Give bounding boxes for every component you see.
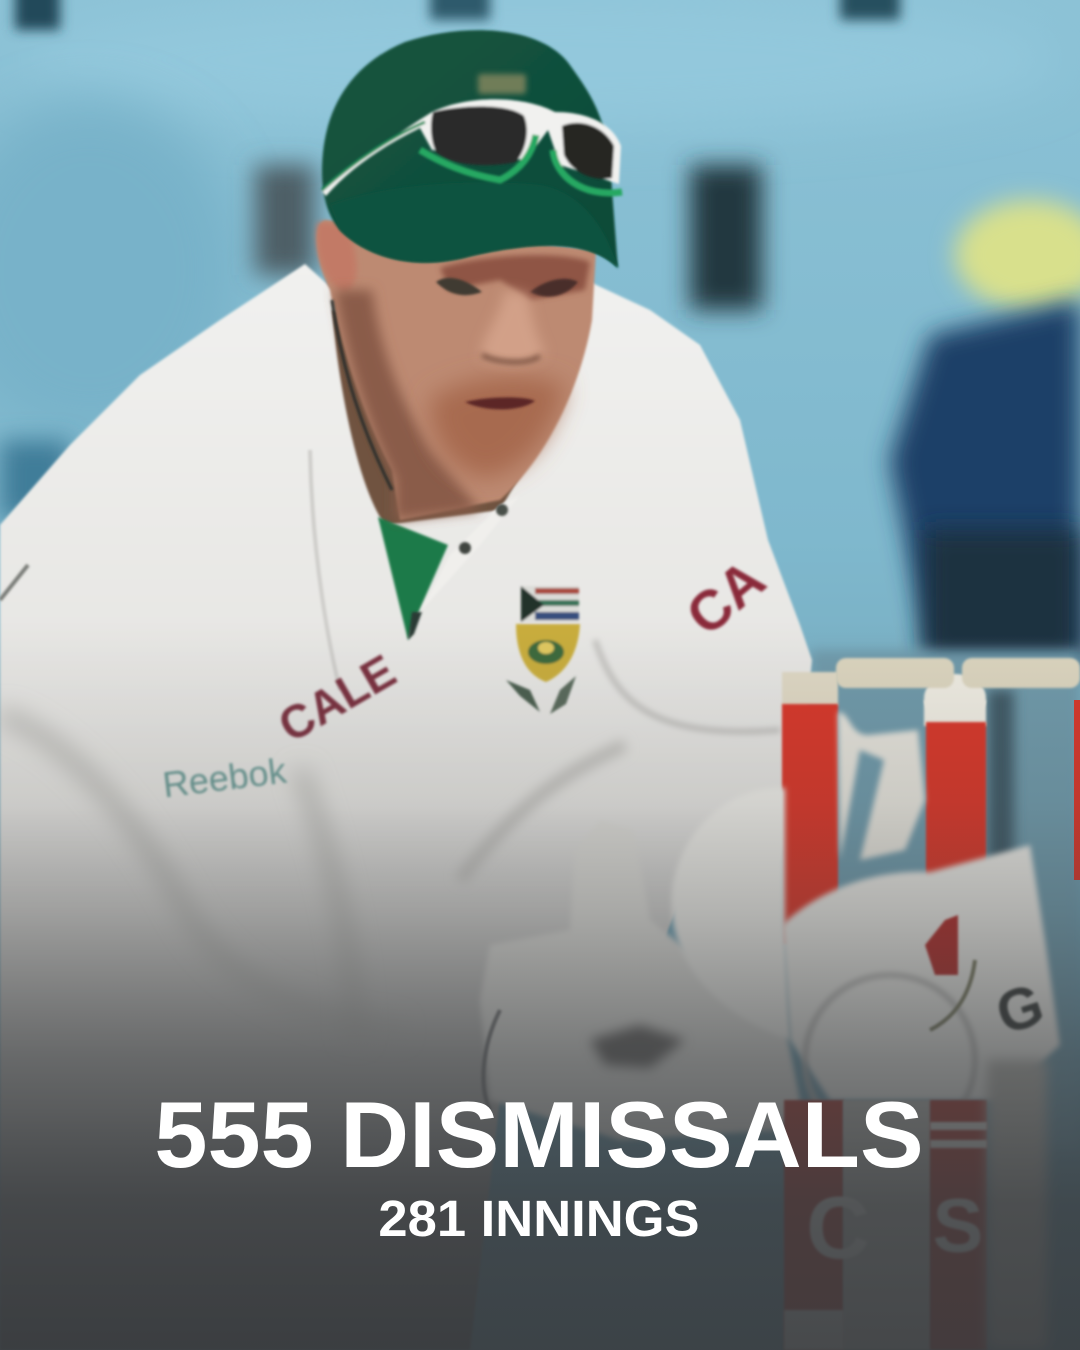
sponsor text on sleeve: Reebok [160,750,290,806]
subtitle: 281 INNINGS [378,1190,700,1247]
shirt collar and green undershirt [332,310,570,640]
sponsor text on arm: CA [674,547,777,647]
green cap [322,30,618,268]
sponsor text on chest: CALE [270,644,404,752]
wicketkeeping gloves and pads [480,788,1060,1350]
player head and face [316,220,596,520]
wicketkeeping gloves and pads: S [933,1184,983,1269]
stumps and bails [782,658,1080,944]
dark gradient overlay [0,620,1080,1350]
badge: South Africa crest [506,586,580,714]
wicketkeeping gloves and pads: G [988,972,1051,1047]
player body: white shirt [0,264,812,1350]
wicketkeeping gloves and pads: C [806,1178,870,1277]
sunglasses on cap [322,99,622,196]
title: 555 DISMISSALS [154,1082,924,1187]
